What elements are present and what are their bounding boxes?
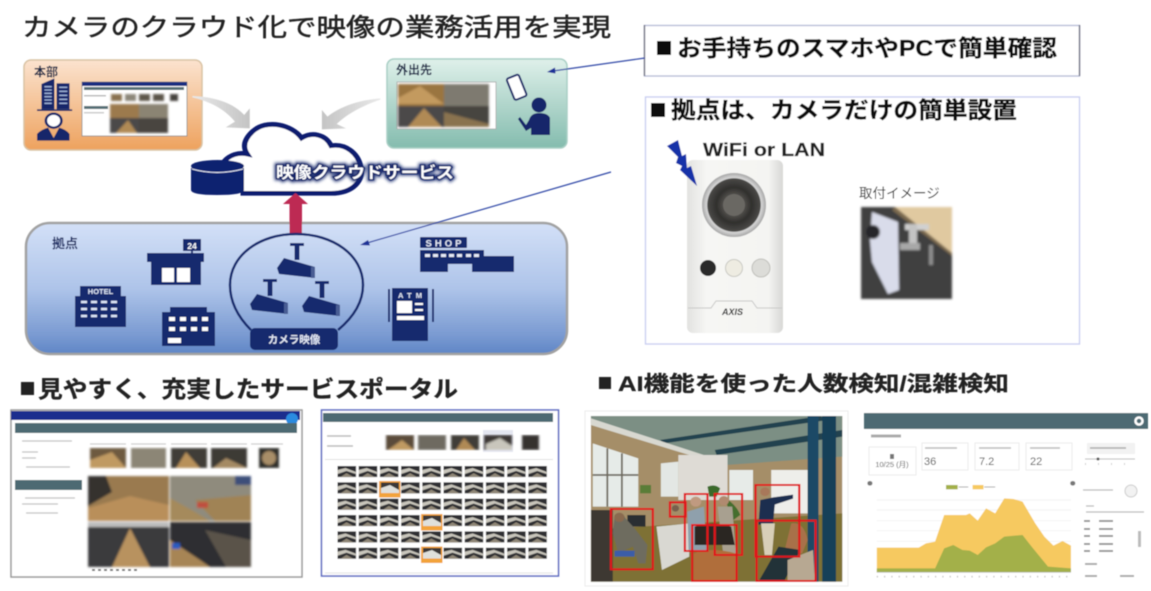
icon: office worker <box>37 114 70 141</box>
KPI cards <box>869 443 1072 475</box>
photo: office with person detection <box>585 411 848 586</box>
panel: camera installation: WiFi or LAN <box>703 140 825 160</box>
column <box>808 416 819 582</box>
selected frames <box>379 481 442 563</box>
screenshot: portal on headquarters PC <box>82 82 187 136</box>
icon: shop <box>420 237 514 272</box>
icon: camera product: AXIS <box>721 307 743 317</box>
thumbnail grid cells <box>338 466 550 559</box>
label: video cloud service: 映像クラウドサービス <box>276 163 454 182</box>
thumbnails row <box>386 430 539 452</box>
icon: ceiling camera left <box>250 279 288 314</box>
icon: shop: SHOP <box>426 238 462 250</box>
label: video cloud service: 映像クラウドサービス <box>276 163 454 182</box>
callout: smartphone and PC <box>644 25 1080 76</box>
arrow: remote to cloud <box>322 98 380 129</box>
back wall and windows <box>678 455 728 500</box>
icon: cloud <box>224 124 361 193</box>
icon: ceiling camera right <box>302 281 340 316</box>
group: camera video dome <box>230 234 363 350</box>
screenshot: camera portal <box>11 410 302 577</box>
people <box>613 513 647 563</box>
label: camera video: カメラ映像 <box>268 333 321 346</box>
icon: lightning bolt <box>667 140 697 186</box>
icon: person with phone <box>518 98 550 135</box>
panel: remote location <box>387 59 567 148</box>
screenshot: occupancy dashboard <box>864 412 1148 584</box>
time slider <box>1085 443 1135 464</box>
icon: hotel: HOTEL <box>88 287 114 296</box>
floor <box>591 513 842 582</box>
detection boxes <box>611 485 816 581</box>
icon: settings gear <box>1136 418 1142 424</box>
camera views <box>88 476 251 567</box>
callout: smartphone and PC: お手持ちのスマホやPCで簡単確認 <box>677 35 1057 61</box>
label: video cloud service: 映像クラウドサービス <box>276 163 454 182</box>
camera list sidebar <box>1083 485 1144 576</box>
panel: headquarters: 本部 <box>34 64 58 79</box>
title: カメラのクラウド化で映像の業務活用を実現 <box>22 14 611 42</box>
panel: camera installation <box>646 97 1080 344</box>
panel: camera installation: 取付イメージ <box>859 186 940 201</box>
photo: mounting image <box>861 207 952 299</box>
panel: sites: 拠点 <box>52 236 78 251</box>
icon: office building <box>37 78 72 111</box>
arrow: upload to cloud <box>283 193 308 234</box>
icon: convenience store: 24 <box>187 241 197 251</box>
icon: camera product <box>687 160 783 333</box>
icon: ATM: ATM <box>398 291 422 300</box>
panel: sites <box>26 193 567 354</box>
KPI cards: 36 <box>924 456 936 468</box>
icon: convenience store <box>147 239 204 285</box>
icon: ATM <box>388 288 434 341</box>
chart: people count area <box>867 481 1075 577</box>
icon: ceiling camera top <box>277 243 315 278</box>
KPI cards: 10/25 (月) <box>875 460 909 469</box>
KPI cards: 7.2 <box>979 456 994 468</box>
icon: office block <box>162 307 215 346</box>
screenshot: camera views on phone <box>397 82 496 129</box>
screenshot: thumbnail grid <box>322 410 558 576</box>
arrow: portal to cloud <box>192 96 250 128</box>
arrow: callout to remote location <box>547 58 645 74</box>
icon: hotel <box>75 286 126 327</box>
heading: service portal: 見やすく、充実したサービスポータル <box>38 376 458 402</box>
panel: camera installation: 拠点は、カメラだけの簡単設置 <box>671 97 1017 123</box>
thumbnails <box>90 448 279 468</box>
icon: database cylinder <box>191 160 244 195</box>
heading: AI detection: AI機能を使った人数検知/混雑検知 <box>618 373 1009 396</box>
KPI cards: 22 <box>1030 456 1042 468</box>
icon: smartphone <box>506 74 527 100</box>
panel: remote location: 外出先 <box>396 62 432 77</box>
panel: headquarters <box>24 60 202 150</box>
ceiling <box>591 416 842 465</box>
panel: cloud service diagram <box>24 59 567 354</box>
arrow: installation panel to sites <box>360 172 611 246</box>
